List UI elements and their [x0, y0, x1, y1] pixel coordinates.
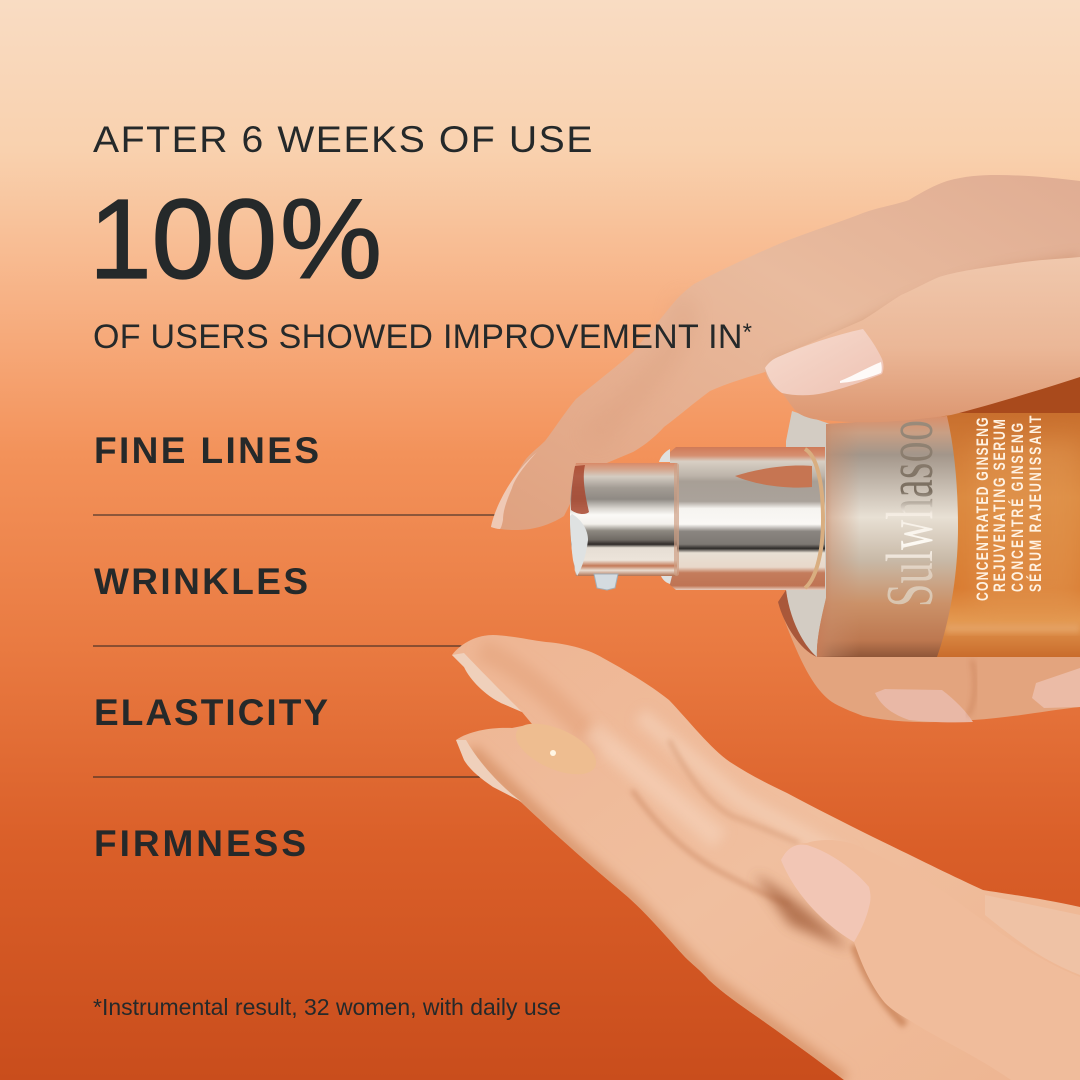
footnote: *Instrumental result, 32 women, with daily use: [93, 994, 561, 1020]
thumb shadow on index finger: [770, 255, 1080, 372]
pump tip: [570, 463, 677, 576]
pump collar: [670, 447, 825, 590]
label line 3: CONCENTRÉ GINSENG: [1008, 423, 1028, 592]
thumb: [781, 840, 1080, 1080]
shaded fingertip: [480, 650, 600, 750]
benefit: fine lines: FINE LINES: [94, 430, 319, 471]
shadow beside thumbnail: [755, 875, 850, 950]
front fingernail: [456, 740, 522, 802]
tip collar joint: [674, 463, 679, 576]
collar reflection: [735, 465, 812, 488]
knuckle shadow: [590, 300, 684, 440]
shaded lower edge: [470, 750, 844, 1080]
bottom reflection: [945, 624, 1080, 633]
highlight on middle finger: [590, 730, 720, 840]
thumb: [765, 257, 1080, 422]
collar ring: [805, 449, 823, 588]
serum highlight: [550, 750, 556, 756]
tip left facet: [570, 514, 588, 576]
big stat: 100%: [89, 176, 382, 302]
lower fingernails of holding hand: [875, 660, 1080, 722]
index fingernail: [491, 452, 537, 529]
serum bottle: [570, 372, 1080, 657]
thumbnail: [765, 329, 884, 395]
divider lines: [93, 515, 500, 777]
dark upper glass: [930, 372, 1080, 413]
digits: 100: [89, 176, 277, 302]
nail: [875, 689, 973, 722]
label line 4: SÉRUM RAJEUNISSANT: [1026, 416, 1046, 592]
label line 1: CONCENTRATED GINSENG: [974, 417, 993, 601]
flange disc: [786, 411, 835, 657]
highlight on back finger: [638, 712, 831, 843]
crease between front and middle fingers: [632, 790, 790, 905]
percent sign: %: [280, 176, 382, 302]
thumbnail: [781, 845, 870, 942]
tip copper reflection: [571, 465, 589, 514]
brand name: Sulwhasoo: [873, 420, 948, 607]
benefit: wrinkles: WRINKLES: [94, 561, 308, 602]
thumbnail highlight: [840, 362, 882, 383]
nozzle: [594, 574, 618, 590]
crease between middle and back fingers: [669, 740, 799, 843]
photo: index finger: [491, 175, 1080, 530]
nail: [1032, 668, 1080, 708]
flange copper edge: [778, 590, 817, 657]
benefit list: [94, 430, 328, 864]
photo: thumb holding bottle: [765, 257, 1080, 422]
photo: lower hand receiving serum: [452, 635, 1080, 1080]
heading: after 6 weeks of use: AFTER 6 WEEKS OF USE: [93, 119, 594, 160]
label text: [974, 416, 1046, 601]
finger gap shadow: [968, 660, 975, 716]
cap copper edge: [817, 422, 860, 657]
body shimmer: [975, 440, 1080, 610]
label line 2: REJUVENATING SERUM: [991, 419, 1010, 592]
benefit: elasticity: ELASTICITY: [94, 692, 328, 733]
index finger: [491, 175, 1080, 530]
subheading: *: [743, 319, 752, 346]
collar left crescent: [659, 449, 672, 584]
metal cap: [817, 416, 958, 657]
finger shading: [470, 650, 1080, 1080]
photo: hand back under bottle: [778, 602, 1080, 722]
bottle body: [930, 412, 1080, 657]
palm tone: [985, 895, 1080, 975]
shadow beneath thumb: [854, 945, 905, 1025]
back fingernail: [452, 653, 522, 712]
benefit: firmness: FIRMNESS: [94, 823, 306, 864]
hand silhouette: [452, 635, 1080, 1080]
subheading: OF USERS SHOWED IMPROVEMENT IN: [93, 318, 742, 356]
serum drop: [509, 713, 603, 785]
